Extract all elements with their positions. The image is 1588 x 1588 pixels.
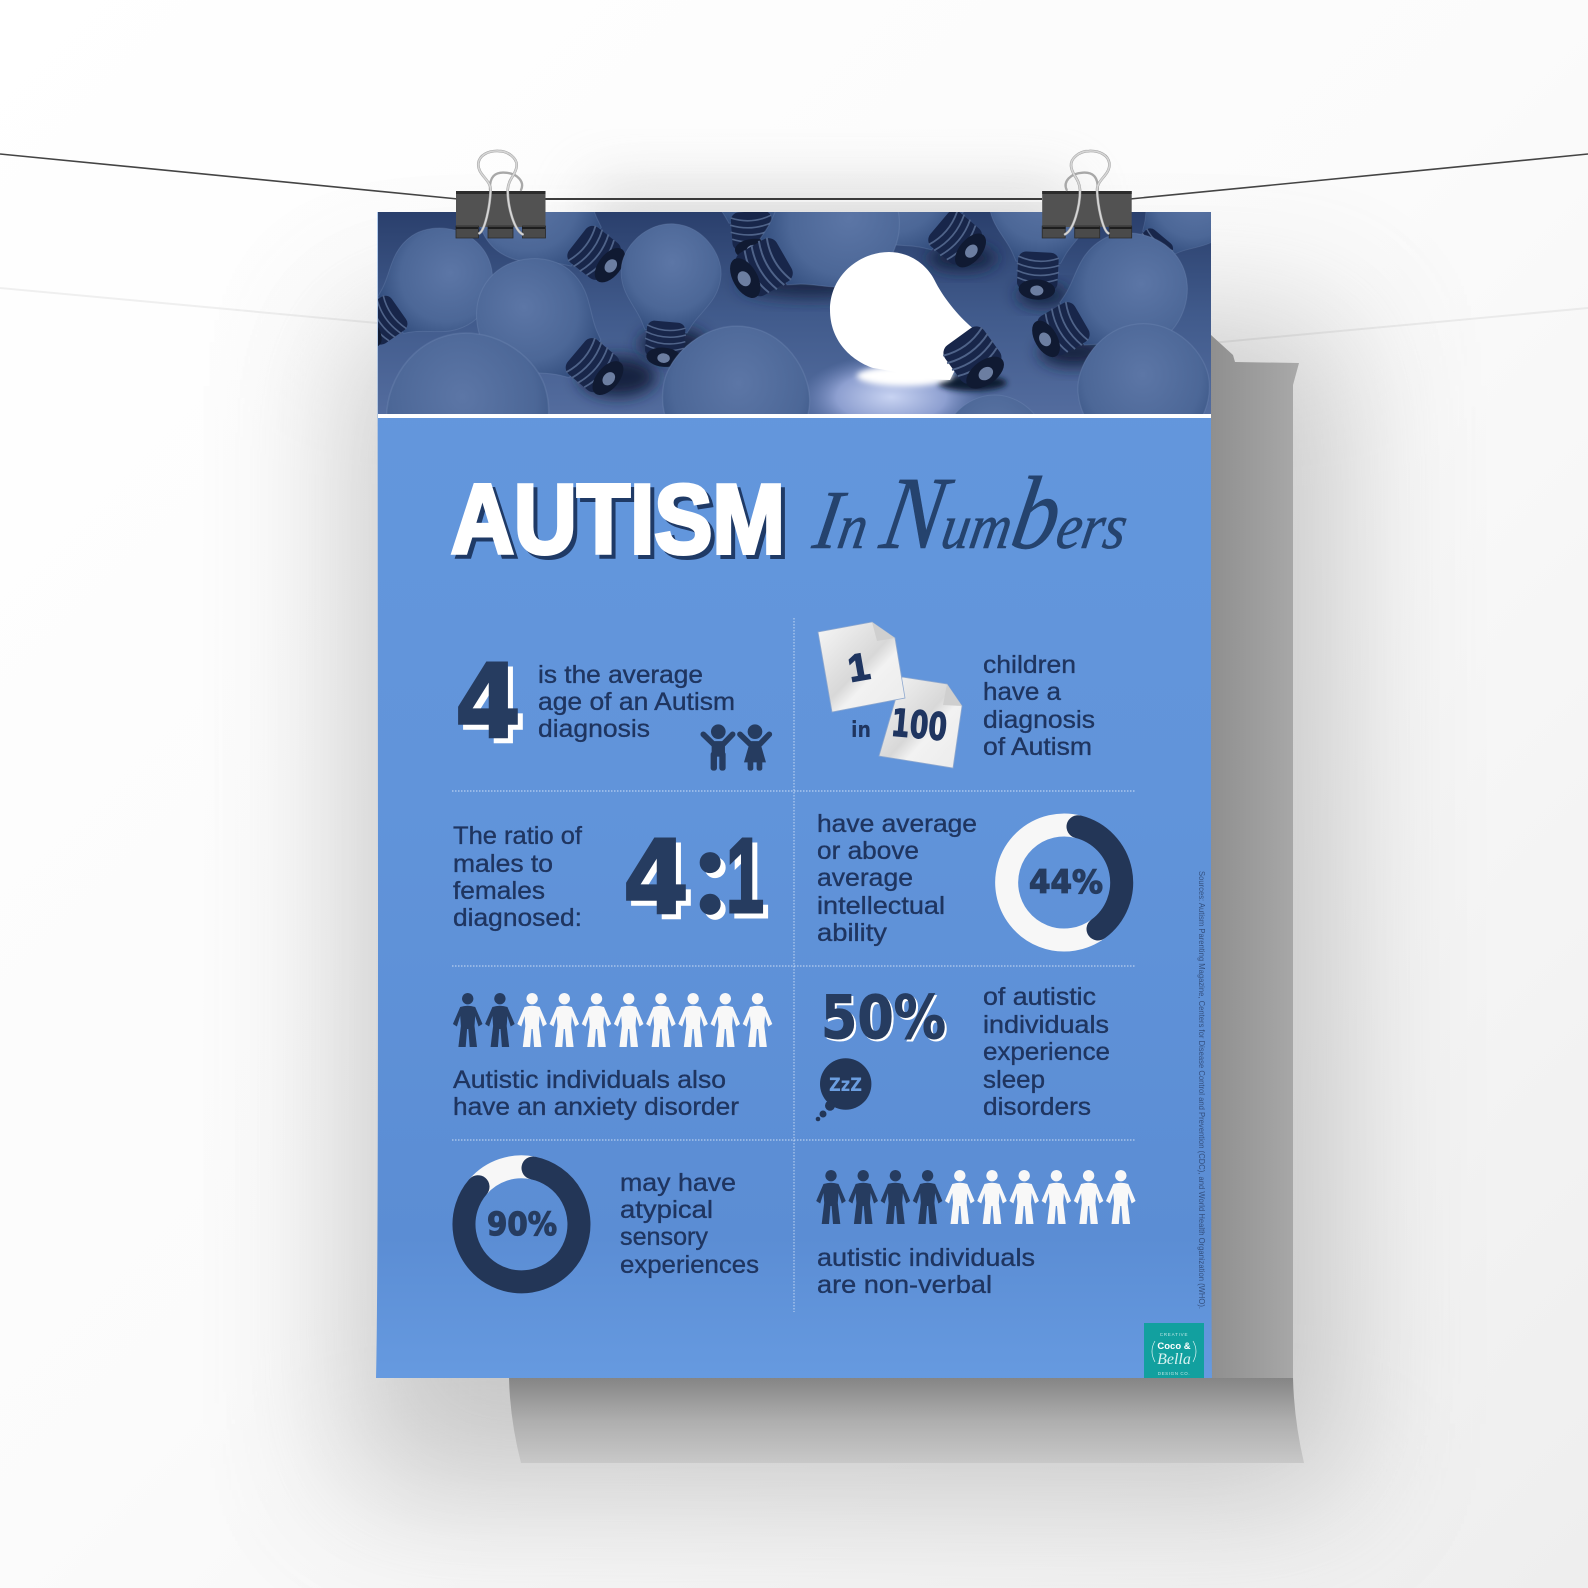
pictogram: 2 of 10 people	[453, 993, 772, 1047]
big ratio number	[623, 798, 769, 947]
big ratio number: 4	[628, 824, 694, 943]
icon: sleep bubble	[816, 1058, 871, 1121]
stat: non-verbal pictogram: are non-verbal	[817, 1271, 992, 1299]
stat: 1 in 100 children	[818, 622, 1095, 768]
donut chart 44%: 44%	[1029, 863, 1103, 901]
stat: 50% sleep disorders: disorders	[983, 1093, 1091, 1121]
logo badge: Bella	[1157, 1351, 1191, 1368]
stat: 50% sleep disorders: 50%	[823, 985, 948, 1055]
stat: 50% sleep disorders: sleep	[983, 1066, 1045, 1094]
stat: 50% sleep disorders	[816, 983, 1110, 1121]
hard cast shadow behind poster	[509, 335, 1304, 1463]
stat: ratio 4:1: The ratio of	[453, 822, 582, 850]
big ratio number: 1	[726, 817, 764, 935]
stat: 50% sleep disorders: experience	[983, 1038, 1110, 1066]
pictogram: 4 of 10 people	[816, 1170, 1136, 1224]
stat: anxiety pictogram	[453, 993, 772, 1121]
binder clip left	[456, 151, 546, 238]
title	[451, 456, 1139, 578]
stat: ratio 4:1: diagnosed:	[453, 904, 582, 932]
big ratio number: 1	[731, 822, 769, 940]
sources note: Sources: Autism Parenting Magazine, Centers for Disease Control and Prevention (CDC), and World Health Organization (WHO).	[1197, 871, 1207, 1309]
stat: 1 in 100 children: diagnosis	[983, 706, 1095, 734]
logo badge: DESIGN CO.	[1158, 1371, 1190, 1376]
big ratio number: 4	[623, 819, 689, 938]
stat: non-verbal pictogram: autistic individuals	[817, 1244, 1035, 1272]
stat: 44% intellectual ability	[817, 810, 1122, 947]
white rule under photo	[378, 414, 1211, 418]
title: AUTISM	[451, 464, 785, 574]
stat: 1 in 100 children: in	[851, 718, 871, 743]
stat: average age 4: is the average	[538, 661, 703, 689]
stat: 50% sleep disorders: 50%	[821, 983, 946, 1053]
donut chart 44%	[1007, 825, 1122, 940]
binder clip right	[1042, 151, 1132, 238]
logo badge: CREATIVE	[1160, 1332, 1188, 1337]
grid dividers	[452, 618, 1135, 1312]
stat: 90% sensory experiences	[464, 1167, 759, 1282]
stat: 50% sleep disorders: of autistic	[983, 983, 1096, 1011]
stat: 44% intellectual ability: have average	[817, 810, 977, 838]
stat: 1 in 100 children: have a	[983, 678, 1061, 706]
stat: anxiety pictogram: have an anxiety disorder	[453, 1093, 739, 1121]
stat: ratio 4:1	[453, 798, 769, 947]
icon: boy and girl	[703, 724, 769, 771]
logo badge	[1144, 1323, 1204, 1378]
stat: average age 4	[455, 643, 769, 771]
title: AUTISM	[455, 468, 789, 578]
stat: anxiety pictogram: Autistic individuals also	[453, 1066, 726, 1094]
stat: 1 in 100 children: of Autism	[983, 733, 1092, 761]
stat: 90% sensory experiences: atypical	[620, 1196, 713, 1224]
stat: 44% intellectual ability: ability	[817, 919, 888, 947]
stat: average age 4: 4	[460, 648, 526, 767]
stat: 1 in 100 children: children	[983, 651, 1076, 679]
donut chart 90%	[464, 1167, 579, 1282]
stat: 90% sensory experiences: may have	[620, 1169, 736, 1197]
stat: 44% intellectual ability: intellectual	[817, 892, 945, 920]
stat: average age 4: diagnosis	[538, 715, 650, 743]
hanging wire	[0, 154, 1588, 201]
icon: paper notes with numbers: 1	[845, 646, 873, 691]
title: In Numbers	[806, 456, 1139, 571]
stat: 90% sensory experiences: experiences	[620, 1251, 759, 1279]
poster sheet	[376, 212, 1212, 1378]
big ratio number: :	[694, 803, 737, 947]
stat: 50% sleep disorders: individuals	[983, 1011, 1109, 1039]
stat: ratio 4:1: males to	[453, 850, 553, 878]
big ratio number: :	[689, 798, 732, 942]
icon: sleep bubble: ZzZ	[829, 1074, 862, 1096]
stat: 44% intellectual ability: or above	[817, 837, 919, 865]
icon: paper notes with numbers: 100	[889, 701, 949, 749]
stat: average age 4: age of an Autism	[538, 688, 735, 716]
stat: 44% intellectual ability: average	[817, 864, 913, 892]
header photo: light bulbs	[378, 212, 1211, 414]
logo badge: Coco &	[1157, 1341, 1191, 1352]
stat: ratio 4:1: females	[453, 877, 545, 905]
donut chart 90%: 90%	[487, 1205, 557, 1243]
stat: 90% sensory experiences: sensory	[620, 1223, 708, 1251]
stat: average age 4: 4	[455, 643, 521, 762]
stat: non-verbal pictogram	[816, 1170, 1136, 1299]
icon: paper notes with numbers	[818, 622, 962, 768]
